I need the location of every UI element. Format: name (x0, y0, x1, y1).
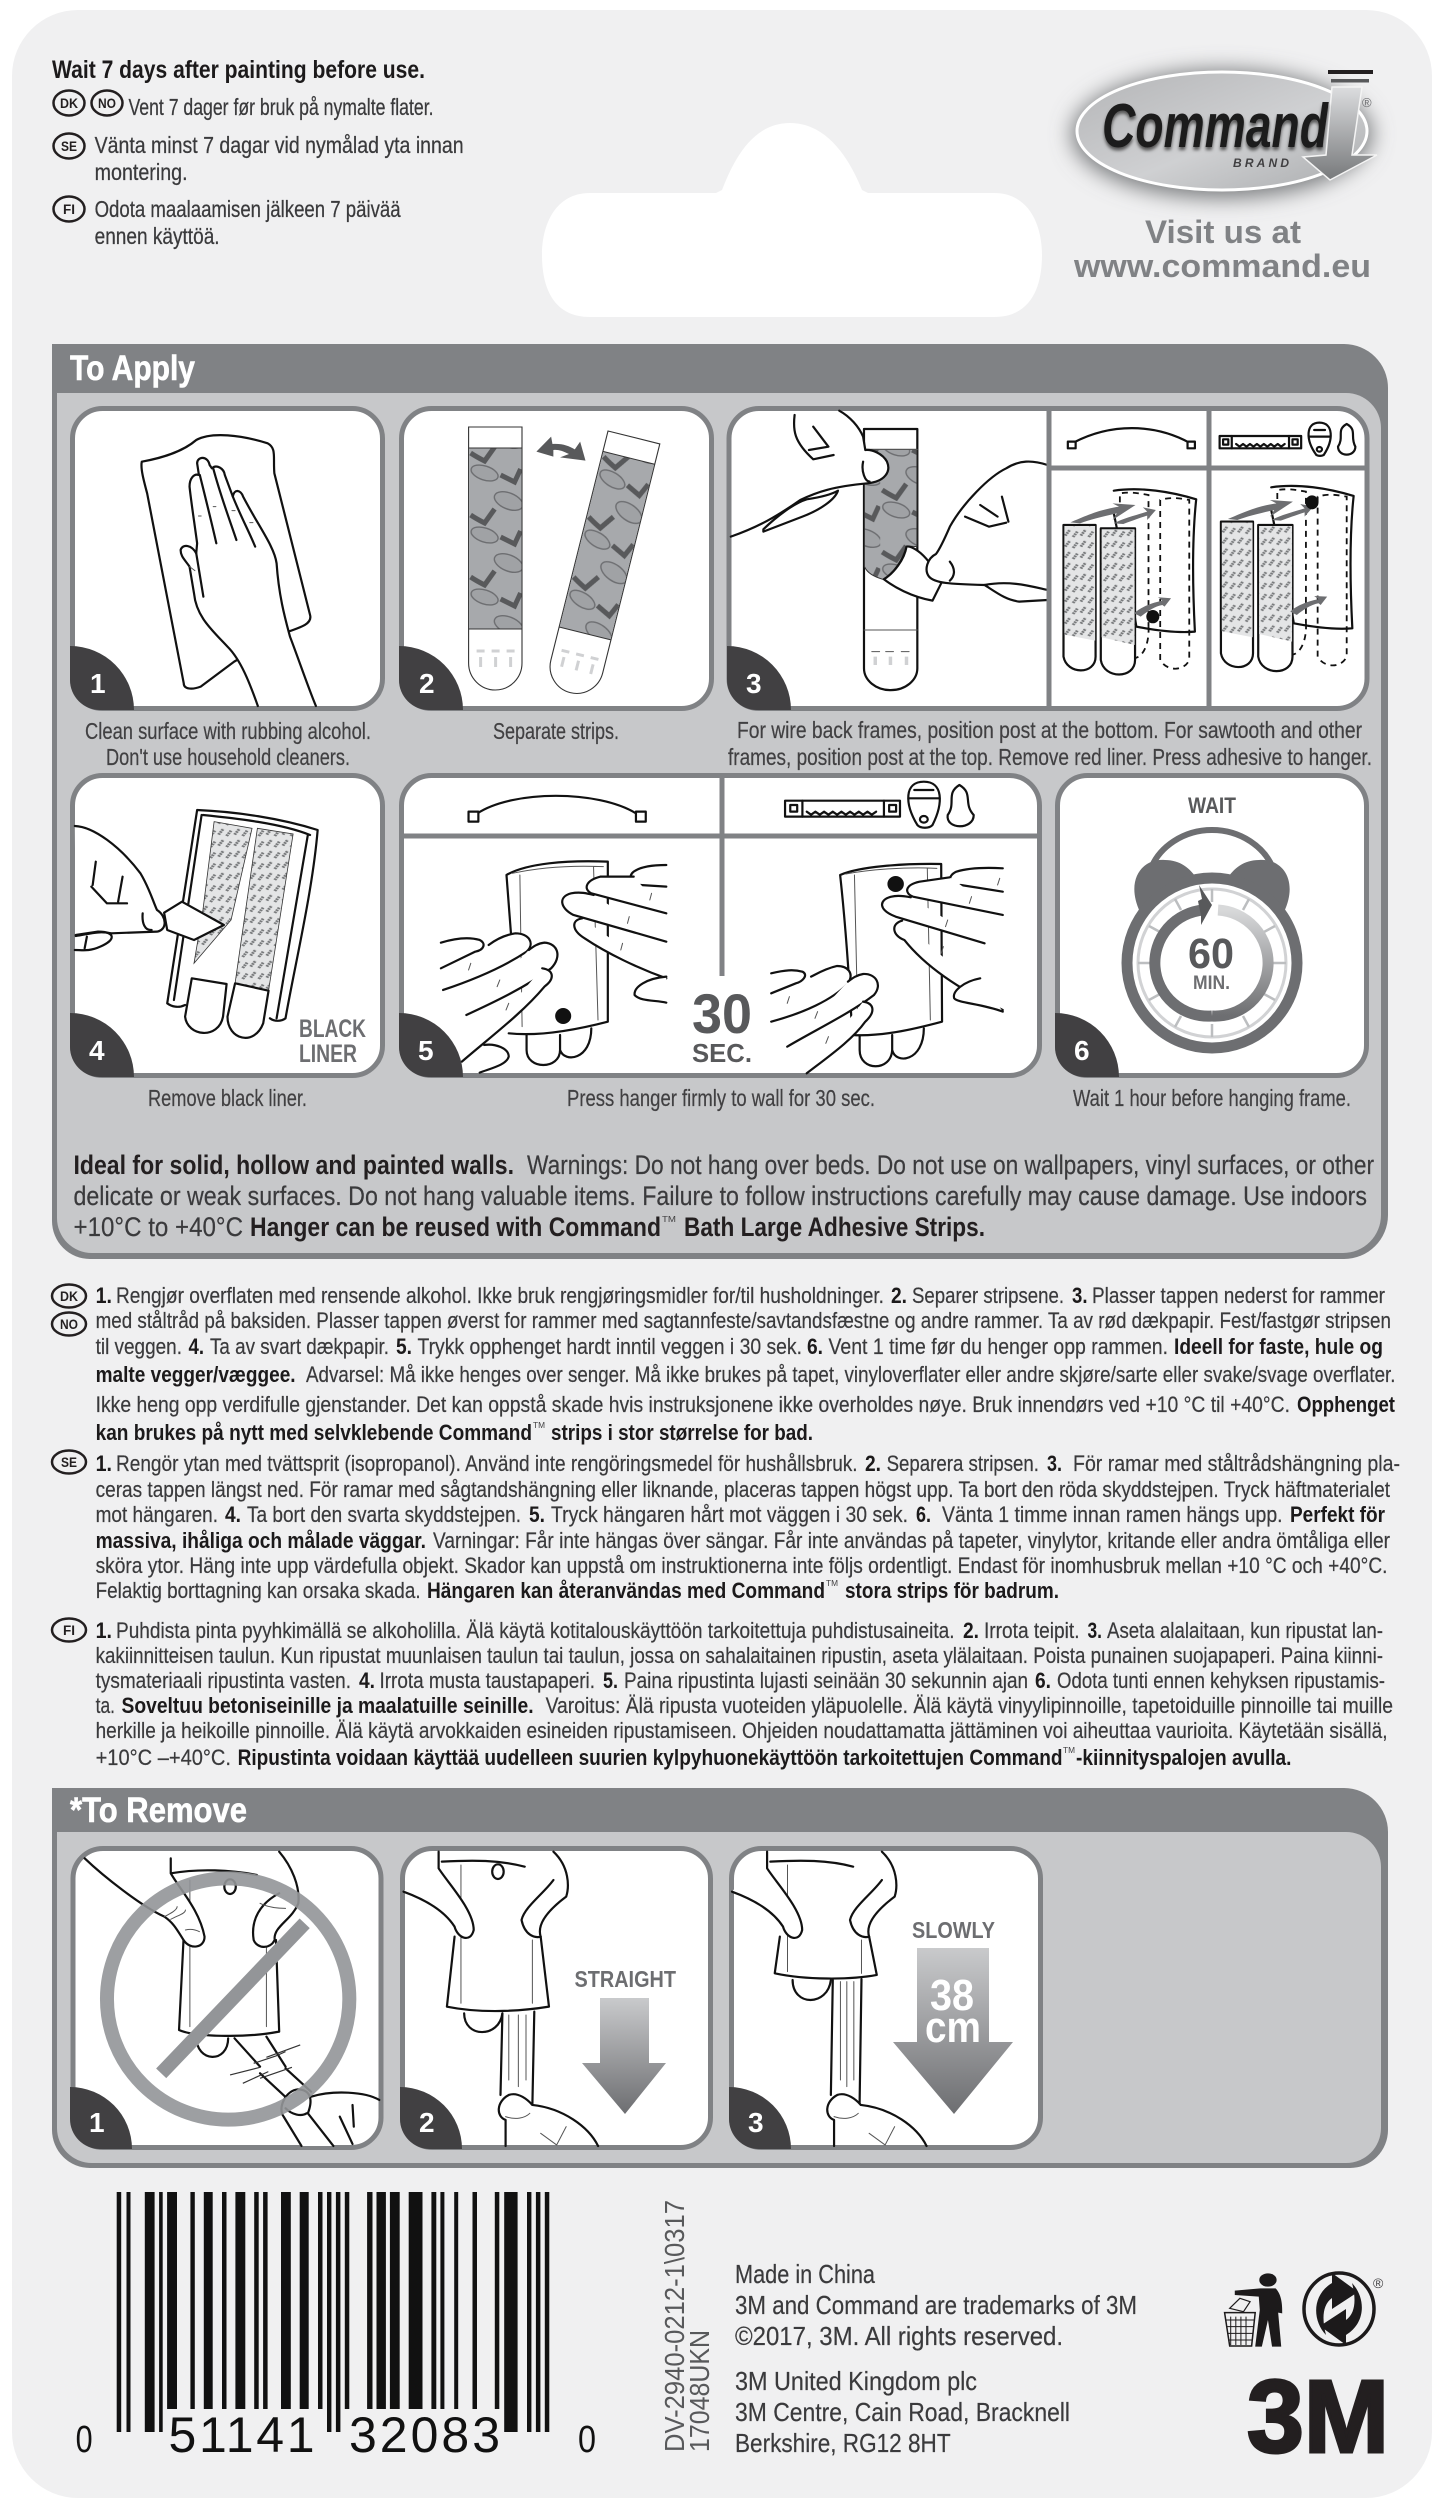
manufacturer legal text: Made in China (735, 2259, 875, 2289)
illustration: wire-back hanger with post at bottom (1063, 489, 1196, 674)
SE instructions: Ta bort den svarta skyddstejpen. (247, 1502, 521, 1527)
illustration: peeling black liner (75, 810, 318, 1038)
arrow: slowly down 38 cm: 38 (930, 1971, 974, 2020)
FI instructions: Paina ripustinta lujasti seinään 30 sekunnin ajan (624, 1668, 1028, 1693)
FI instructions: Irrota teipit. (984, 1618, 1080, 1643)
SE instructions: 6. (916, 1502, 931, 1527)
website callout: www.command.eu (1073, 248, 1371, 284)
step number 2: 2 (419, 668, 435, 699)
step number 4 (70, 1013, 134, 1077)
manufacturer legal text: ©2017, 3M. All rights reserved. (735, 2321, 1063, 2351)
SE instructions: stora strips för badrum. (845, 1578, 1059, 1603)
arrow: slowly down 38 cm (893, 1948, 1013, 2114)
FI instructions: 3. (1088, 1618, 1102, 1643)
icon: sawtooth, D-ring and keyhole hangers (1220, 423, 1355, 456)
label: wait: WAIT (1188, 793, 1236, 818)
step 6 panel (1055, 776, 1366, 1077)
print codes (vertical): DV-2940-0212-1\0317 (659, 2200, 690, 2452)
DK/NO instructions: Ideell for faste, hule og (1174, 1334, 1383, 1359)
FI instructions: TM (1063, 1746, 1075, 1755)
paint warning text: Wait 7 days after painting before use. (52, 56, 425, 84)
step 2 caption: Separate strips. (493, 718, 619, 744)
illustration: pressing sawtooth hanger to wall (771, 864, 1003, 1073)
SE instructions: Separera stripsen. (887, 1451, 1039, 1476)
label: black liner: BLACK (299, 1015, 366, 1043)
illustration: do not pull sideways (85, 1852, 379, 2146)
barcode: 0 (578, 2419, 596, 2461)
label: slowly: SLOWLY (912, 1917, 995, 1943)
DK/NO instructions: Ta av svart dækpapir. (210, 1334, 389, 1359)
icon: left adhesive strip (469, 427, 522, 690)
FI instructions: Irrota musta taustapaperi. (380, 1668, 595, 1693)
language badge NO (52, 1312, 86, 1336)
print codes (vertical) (659, 2200, 715, 2452)
step number 1 (70, 2087, 132, 2149)
illustration: sawtooth hanger with post at top (1221, 486, 1354, 671)
SE instructions: För ramar med ståltrådshängning pla- (1073, 1451, 1400, 1476)
paint warning text: montering. (95, 159, 188, 185)
step number 1: 1 (89, 2107, 105, 2138)
DK/NO instructions: Vent 1 time før du henger opp rammen. (828, 1334, 1168, 1359)
DK/NO instructions: TM (533, 1421, 545, 1430)
step number 6 (1055, 1013, 1119, 1077)
icon: alarm clock 60 minutes (1127, 830, 1297, 1048)
DK/NO instructions: Ikke heng opp verdifulle gjenstander. Det kan oppstå skade hvis instruksjonene ikke overholdes nøye. Bruk innendørs ved +10 °C til +40°C. (96, 1392, 1290, 1417)
step number 3 (729, 2087, 791, 2149)
FI instructions: 1. (96, 1618, 112, 1643)
warnings text block: Bath Large Adhesive Strips. (684, 1212, 985, 1242)
label: 30 sec: SEC. (692, 1038, 752, 1068)
DK/NO instructions: kan brukes på nytt med selvklebende Command (96, 1420, 532, 1445)
DK/NO instructions: 1. (96, 1283, 112, 1308)
paint warning text: NO (98, 95, 116, 111)
step 5 caption: Press hanger firmly to wall for 30 sec. (567, 1085, 875, 1111)
step number 5 (399, 1013, 463, 1077)
Command brand logo: BRAND (1233, 156, 1289, 170)
manufacturer legal text: 3M United Kingdom plc (735, 2366, 977, 2396)
DK/NO instructions: til veggen. (96, 1334, 182, 1359)
language badge FI: FI (63, 1622, 75, 1638)
remove step 2 panel (400, 1848, 710, 2149)
paint warning text: Vänta minst 7 dagar vid nymålad yta innan (95, 132, 464, 158)
step number 1 (70, 646, 134, 710)
paint warning text: SE (61, 138, 77, 154)
step number 2 (400, 2087, 462, 2149)
paint warning text (52, 56, 464, 249)
label: black liner: LINER (299, 1040, 357, 1068)
step 1 caption: Clean surface with rubbing alcohol. (85, 718, 371, 744)
panel: To Remove (52, 1788, 1388, 2168)
language badge FI (52, 1618, 86, 1642)
SE instructions: massiva, ihåliga och målade väggar. (96, 1528, 426, 1553)
panel: To Apply (52, 344, 1388, 1259)
icon: wire hanger (469, 796, 646, 822)
warnings text block: +10°C to +40°C (74, 1212, 243, 1242)
DK/NO instructions: malte vegger/væggee. (96, 1362, 296, 1387)
icon: tidy man with bin (1225, 2273, 1282, 2347)
step 3 caption (728, 717, 1372, 770)
Command brand logo: ® (1362, 95, 1372, 110)
step number 3 (727, 646, 791, 710)
arrow: slowly down 38 cm: cm (925, 2003, 981, 2052)
manufacturer legal text: 3M and Command are trademarks of 3M (735, 2290, 1137, 2320)
step 4 caption: Remove black liner. (148, 1085, 307, 1111)
FI instructions: 2. (963, 1618, 979, 1643)
label: straight: STRAIGHT (574, 1966, 676, 1992)
SE instructions: mot hängaren. (96, 1502, 218, 1527)
SE instructions: 5. (529, 1502, 545, 1527)
icon: right adhesive strip (544, 431, 660, 699)
language badge NO: NO (60, 1316, 78, 1332)
icon: wire hanger (1068, 428, 1195, 448)
paint warning text: Odota maalaamisen jälkeen 7 päivää (95, 196, 401, 222)
remove step 3 panel (729, 1848, 1040, 2149)
website callout: Visit us at (1145, 214, 1301, 250)
barcode: 0 (76, 2419, 93, 2461)
step number 6: 6 (1074, 1035, 1090, 1066)
language badge DK (52, 1284, 86, 1308)
step 1 caption: Don't use household cleaners. (106, 744, 350, 770)
SE instructions: Felaktig borttagning kan orsaka skada. (96, 1578, 421, 1603)
step 3 panel (727, 408, 1367, 710)
FI instructions: Puhdista pinta pyyhkimällä se alkoholilla. Älä käytä kotitalouskäyttöön tarkoitettuja puhdistusaineita. (116, 1618, 954, 1643)
warnings text block (74, 1150, 1374, 1242)
FI instructions: Soveltuu betoniseinille ja maalatuille seinille. (122, 1693, 534, 1718)
DK/NO instructions (52, 1283, 1396, 1445)
step number 4: 4 (89, 1035, 105, 1066)
FI instructions: Ripustinta voidaan käyttää uudelleen suurien kylpyhuonekäyttöön tarkoitettujen Command (238, 1745, 1063, 1770)
DK/NO instructions: 6. (807, 1334, 823, 1359)
print codes (vertical): 17048UKN (684, 2330, 715, 2452)
pane dividers (1049, 408, 1367, 709)
warnings text block: TM (662, 1215, 676, 1224)
SE instructions: 2. (865, 1451, 881, 1476)
icon: green dot recycling (1304, 2273, 1384, 2345)
barcode (76, 2192, 596, 2463)
paint warning text: Vent 7 dager før bruk på nymalte flater. (128, 94, 434, 120)
manufacturer legal text: Berkshire, RG12 8HT (735, 2428, 951, 2458)
heading: To Apply: To Apply (70, 349, 195, 388)
arrow: straight down (582, 1998, 666, 2114)
hang-hole cutout (542, 123, 1042, 317)
warnings text block: Ideal for solid, hollow and painted walls. (74, 1150, 514, 1180)
label: black liner (299, 1015, 366, 1068)
warnings text block: Hanger can be reused with Command (250, 1212, 661, 1242)
step 2 panel (399, 408, 712, 710)
SE instructions: Rengör ytan med tvättsprit (isopropanol). Använd inte rengöringsmedel för hushållsbruk. (116, 1451, 858, 1476)
SE instructions: Hängaren kan återanvändas med Command (427, 1578, 825, 1603)
DK/NO instructions: Plasser tappen nederst for rammer (1092, 1283, 1385, 1308)
step 6 caption: Wait 1 hour before hanging frame. (1073, 1085, 1351, 1111)
step number 2: 2 (419, 2107, 435, 2138)
SE instructions: 4. (225, 1502, 241, 1527)
icon: sawtooth, D-ring and keyhole hangers (785, 782, 974, 828)
language badge SE: SE (61, 1454, 77, 1470)
icon: alarm clock 60 minutes: 60 (1188, 930, 1234, 978)
illustration: pulling strip straight (404, 1852, 598, 2146)
illustration: pressing wire-back hanger to wall (441, 861, 666, 1073)
FI instructions: tysmateriaali ripustinta vasten. (96, 1668, 351, 1693)
icon: hand wiping with cloth (141, 435, 316, 706)
DK/NO instructions: Opphenget (1297, 1392, 1396, 1417)
FI instructions: Aseta alalaitaan, kun ripustat lan- (1107, 1618, 1383, 1643)
pane dividers (401, 775, 1040, 976)
step number 5: 5 (418, 1035, 434, 1066)
remove step 1 panel (70, 1848, 381, 2149)
step 1 caption (85, 718, 371, 770)
SE instructions: 3. (1047, 1451, 1062, 1476)
language badge DK: DK (60, 1288, 78, 1304)
label: 30 sec: 30 (692, 982, 752, 1045)
manufacturer legal text: 3M Centre, Cain Road, Bracknell (735, 2397, 1070, 2427)
illustration: stretching strip slowly (732, 1852, 927, 2146)
FI instructions: 4. (359, 1668, 375, 1693)
step number 3: 3 (746, 668, 762, 699)
SE instructions: 1. (96, 1451, 112, 1476)
SE instructions: TM (826, 1579, 838, 1588)
SE instructions: Perfekt för (1290, 1502, 1385, 1527)
FI instructions: -kiinnityspalojen avulla. (1076, 1745, 1292, 1770)
icon: alarm clock 60 minutes: MIN. (1193, 973, 1230, 994)
illustration: removing red liner (731, 411, 1047, 690)
DK/NO instructions: 4. (188, 1334, 204, 1359)
SE instructions (52, 1450, 1400, 1603)
FI instructions: Odota tunti ennen kehyksen ripustamis- (1057, 1668, 1385, 1693)
icon: green dot recycling: ® (1373, 2275, 1384, 2291)
step 1 panel (70, 408, 382, 710)
3M logo: 3M (1247, 2359, 1389, 2474)
DK/NO instructions: strips i stor størrelse for bad. (551, 1420, 813, 1445)
paint warning text: FI (63, 201, 75, 217)
FI instructions (52, 1618, 1393, 1770)
step number 3: 3 (748, 2107, 764, 2138)
FI instructions: 6. (1035, 1668, 1051, 1693)
website callout (1073, 214, 1371, 284)
FI instructions: 5. (603, 1668, 618, 1693)
Command brand logo: Command (1102, 92, 1329, 161)
SE instructions: Tryck hängaren hårt mot väggen i 30 sek. (551, 1502, 908, 1527)
DK/NO instructions: 5. (396, 1334, 412, 1359)
step number 2 (399, 646, 463, 710)
SE instructions: Vänta 1 timme innan ramen hängs upp. (942, 1502, 1283, 1527)
DK/NO instructions: 3. (1072, 1283, 1088, 1308)
DK/NO instructions: Separer stripsene. (912, 1283, 1064, 1308)
manufacturer legal text (735, 2259, 1137, 2458)
Command brand logo (1072, 70, 1377, 198)
step 5 panel (399, 775, 1040, 1077)
FI instructions: +10°C –+40°C. (96, 1745, 231, 1770)
barcode: 32083 (349, 2407, 500, 2463)
DK/NO instructions: Rengjør overflaten med rensende alkohol. Ikke bruk rengjøringsmidler for/til husholdninger. (116, 1283, 884, 1308)
step 4 panel (70, 776, 382, 1077)
paint warning text: ennen käyttöä. (95, 223, 220, 249)
heading: To Remove: *To Remove (70, 1791, 247, 1830)
FI instructions: ta. (96, 1693, 115, 1718)
icon: separate arrow (536, 437, 586, 461)
DK/NO instructions: Trykk opphenget hardt inntil veggen i 30 sek. (418, 1334, 802, 1359)
barcode: 51141 (168, 2407, 314, 2463)
step number 1: 1 (90, 668, 106, 699)
paint warning text: DK (60, 95, 78, 111)
DK/NO instructions: 2. (891, 1283, 907, 1308)
language badge SE (52, 1450, 86, 1474)
